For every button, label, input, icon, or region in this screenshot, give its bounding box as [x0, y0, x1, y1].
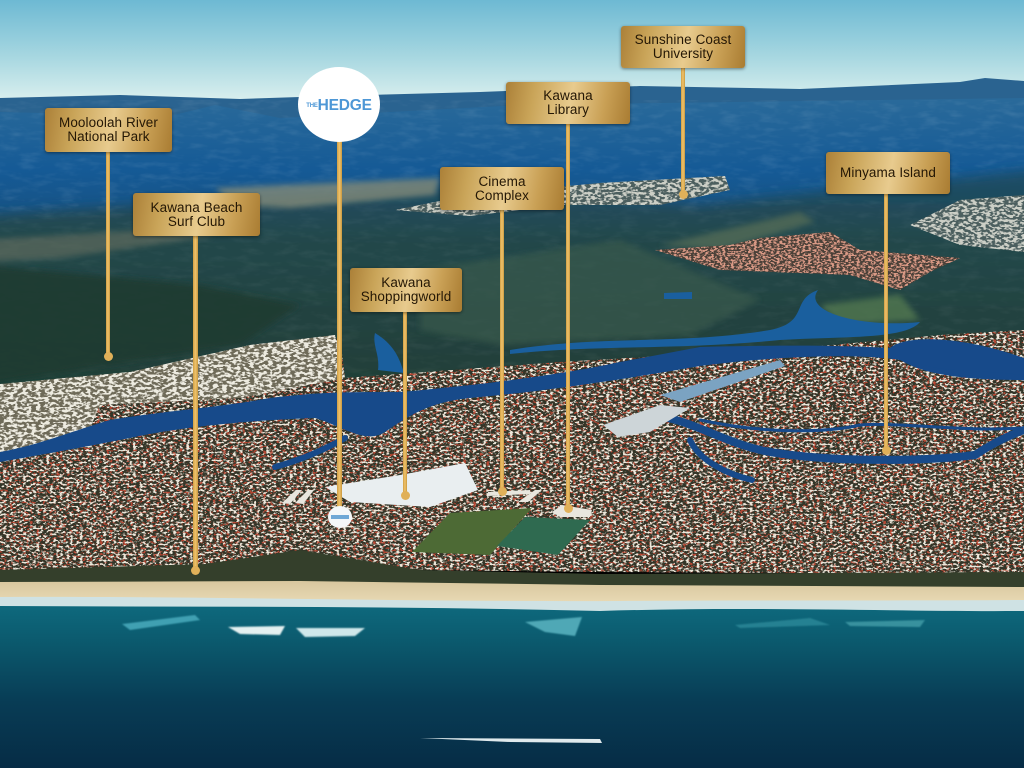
- label: Sunshine Coast University: University: [653, 46, 713, 61]
- far hinterland: [0, 98, 1024, 240]
- label: Kawana Shoppingworld: Shoppingworld: [361, 289, 451, 304]
- logo: The Hedge: THEHEDGE: [306, 97, 372, 114]
- label: Kawana Beach Surf Club: [133, 193, 260, 236]
- boat wake: [420, 738, 602, 743]
- pin: Kawana Library: [566, 122, 570, 508]
- label: Cinema Complex: [440, 167, 564, 210]
- coastal vegetation strip: [0, 550, 1024, 590]
- sky: [0, 0, 1024, 100]
- label: Cinema Complex: Cinema: [478, 174, 526, 188]
- marina: [603, 405, 690, 437]
- label: Mooloolah River National Park: [45, 108, 172, 152]
- surf line: [0, 597, 1024, 611]
- pin: Kawana Beach Surf Club: [193, 234, 198, 570]
- label: Cinema Complex: Complex: [475, 188, 529, 202]
- wetland clearings: [0, 178, 920, 385]
- pin end: Kawana Library: [564, 504, 573, 513]
- side canals: [275, 368, 1024, 480]
- label: Kawana Beach Surf Club: Surf Club: [168, 214, 225, 228]
- pin end: Kawana Shoppingworld: [401, 491, 410, 500]
- pin: Minyama Island: [884, 192, 888, 450]
- label: Kawana Beach Surf Club: Kawana Beach: [150, 200, 242, 214]
- pin end: Kawana Beach Surf Club: [191, 566, 200, 575]
- label: Minyama Island: [826, 152, 950, 194]
- suburbs: [0, 330, 1024, 592]
- pin end: Mooloolah River National Park: [104, 352, 113, 361]
- label: Kawana Library: Library: [547, 102, 589, 117]
- sandbars and breaking waves: [122, 615, 925, 637]
- label: Mooloolah River National Park: National Park: [67, 129, 150, 144]
- label: Kawana Library: [506, 82, 630, 124]
- logo: The Hedge: [298, 67, 380, 142]
- label: Kawana Library: Kawana: [543, 88, 593, 103]
- main canal: [0, 339, 1024, 462]
- site marker: The Hedge: [328, 506, 352, 528]
- label: Mooloolah River National Park: Mooloolah River: [59, 115, 158, 130]
- pin: Sunshine Coast University: [681, 66, 685, 194]
- ocean: [0, 604, 1024, 768]
- pin: Cinema Complex: [500, 208, 504, 490]
- label: Minyama Island: Minyama Island: [840, 165, 936, 180]
- beach: [0, 581, 1024, 612]
- car parks and library: [282, 490, 592, 517]
- northern white housing estate: [0, 330, 350, 455]
- label: Kawana Shoppingworld: Kawana: [381, 275, 431, 290]
- pin end: Sunshine Coast University: [679, 190, 688, 199]
- label: Kawana Shoppingworld: [350, 268, 462, 312]
- pin: Mooloolah River National Park: [106, 150, 110, 358]
- Kawana Shoppingworld buildings: [325, 463, 478, 507]
- pin: Kawana Shoppingworld: [403, 310, 407, 494]
- label: Sunshine Coast University: [621, 26, 745, 68]
- distant developments: [396, 176, 1024, 290]
- pin end: Minyama Island: [882, 446, 891, 455]
- upper waterways: [374, 290, 920, 373]
- distant mountains: [0, 78, 1024, 210]
- pin end: Cinema Complex: [498, 487, 507, 496]
- sports fields: [412, 508, 532, 555]
- label: Sunshine Coast University: Sunshine Coast: [635, 32, 731, 47]
- mid-distance bushland: [0, 165, 1024, 420]
- pin: The Hedge: [337, 138, 342, 508]
